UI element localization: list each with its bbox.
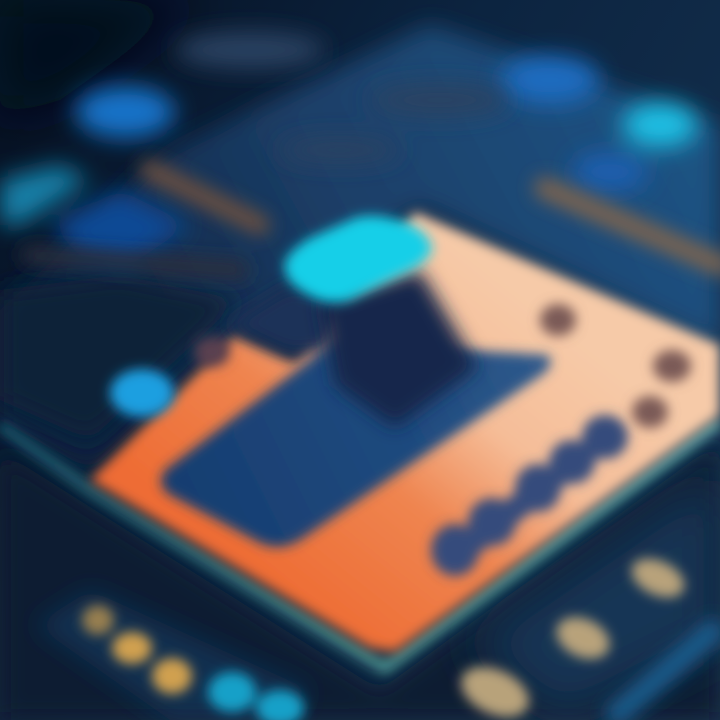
cube: dark block (320, 270, 478, 428)
cyan dot (110, 369, 174, 417)
blue glow, bottom right (610, 625, 720, 720)
cyan dots, bottom (208, 672, 304, 720)
element: dark shadow left of cube (225, 285, 345, 355)
bright highlights, upper right (500, 56, 698, 192)
panel: bottom dark base (0, 440, 720, 720)
panel: left dark strip (0, 275, 240, 440)
panel: orange content area (90, 212, 720, 652)
panel: bottom right blue area (470, 470, 720, 720)
card: dark blue panel (161, 338, 551, 547)
blue glow, bottom left (35, 590, 310, 720)
brown bars (30, 170, 720, 270)
cube: cyan top (285, 216, 432, 302)
faint top labels (175, 32, 510, 162)
row of round buttons (431, 415, 628, 576)
element: device edge glow (0, 422, 720, 668)
gold dots, bottom left (82, 605, 192, 694)
gold pills, bottom right (453, 551, 691, 720)
panel: upper screen area (0, 25, 720, 470)
small brown markers (194, 304, 691, 428)
panel: top left dark area (0, 0, 200, 120)
blue tiles, upper left (0, 86, 190, 265)
